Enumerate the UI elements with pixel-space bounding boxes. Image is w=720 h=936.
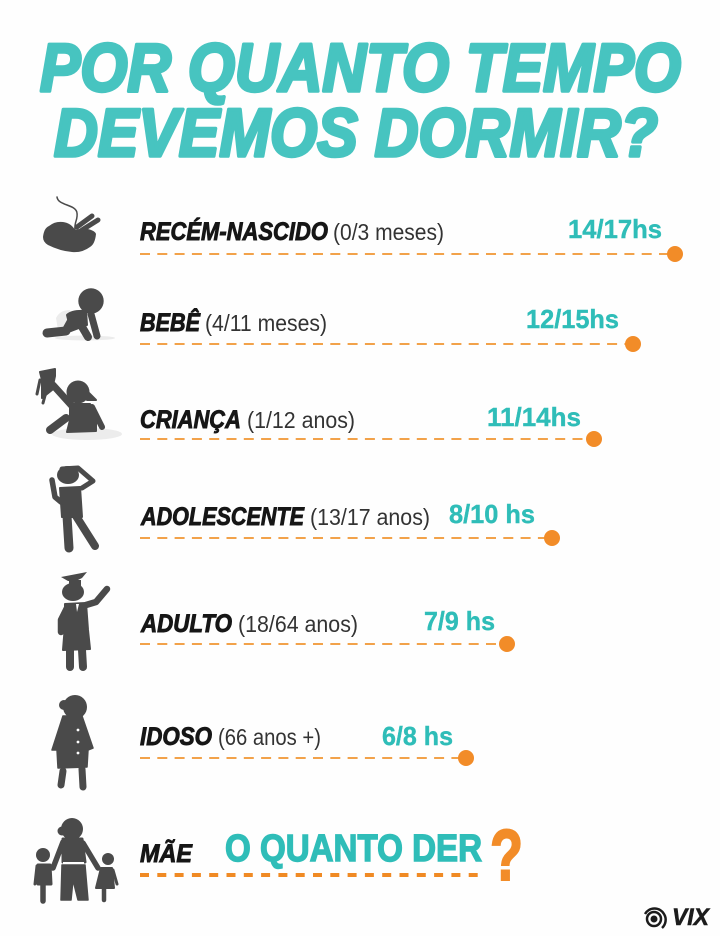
label: adolescente: ADOLESCENTE — [140, 503, 305, 531]
age: 1/12 anos: (1/12 anos) — [247, 407, 355, 433]
row: idoso — [52, 695, 474, 787]
value: 8/10 hs: 8/10 hs — [449, 499, 535, 529]
dot — [544, 530, 560, 546]
value: o quanto der: O QUANTO DER — [225, 828, 482, 870]
dashed bar — [140, 253, 675, 255]
icon: mother with children — [35, 818, 117, 901]
dashed bar — [140, 537, 552, 539]
value: 6/8 hs: 6/8 hs — [382, 721, 453, 751]
logo text: VIX — [672, 904, 711, 931]
logo: vix — [645, 904, 711, 931]
icon: newborn — [43, 197, 98, 252]
icon: crawling baby — [47, 288, 115, 340]
row: mãe — [35, 816, 523, 901]
label: idoso: IDOSO — [140, 723, 212, 751]
icon: teenager — [52, 466, 95, 548]
question mark: ? — [490, 816, 523, 896]
row: adolescente — [52, 466, 560, 548]
dashed bar — [140, 438, 594, 440]
dot — [499, 636, 515, 652]
age: 0/3 meses: (0/3 meses) — [333, 219, 444, 245]
row: adulto — [61, 572, 515, 667]
value: 7/9 hs: 7/9 hs — [424, 606, 495, 636]
icon: graduate — [61, 572, 107, 667]
dot — [458, 750, 474, 766]
dashed bar — [140, 873, 480, 877]
age: 18/64 anos: (18/64 anos) — [238, 611, 358, 637]
age: 4/11 meses: (4/11 meses) — [205, 310, 327, 336]
dashed bar — [140, 757, 466, 759]
icon: child with doll — [37, 369, 122, 440]
icon: elderly woman — [52, 695, 93, 787]
value: 12/15hs: 12/15hs — [526, 304, 619, 334]
dashed bar — [140, 343, 633, 345]
label: criança: CRIANÇA — [140, 406, 241, 434]
age: 66 anos +: (66 anos +) — [218, 724, 321, 750]
dot — [625, 336, 641, 352]
row: criança — [37, 369, 602, 447]
row: recém-nascido — [43, 197, 683, 262]
value: 14/17hs: 14/17hs — [568, 214, 662, 244]
icon: vix spiral — [645, 909, 666, 928]
age: 13/17 anos: (13/17 anos) — [310, 504, 430, 530]
label: mãe: MÃE — [140, 838, 193, 868]
label: bebê: BEBÊ — [140, 307, 201, 337]
row: bebê — [47, 288, 641, 352]
label: adulto: ADULTO — [140, 610, 232, 638]
dot — [667, 246, 683, 262]
label: recém-nascido: RECÉM-NASCIDO — [140, 217, 328, 246]
dashed bar — [140, 643, 507, 645]
value: 11/14hs: 11/14hs — [487, 402, 581, 432]
title: DEVEMOS DORMIR? — [54, 95, 658, 171]
dot — [586, 431, 602, 447]
title — [40, 30, 681, 171]
